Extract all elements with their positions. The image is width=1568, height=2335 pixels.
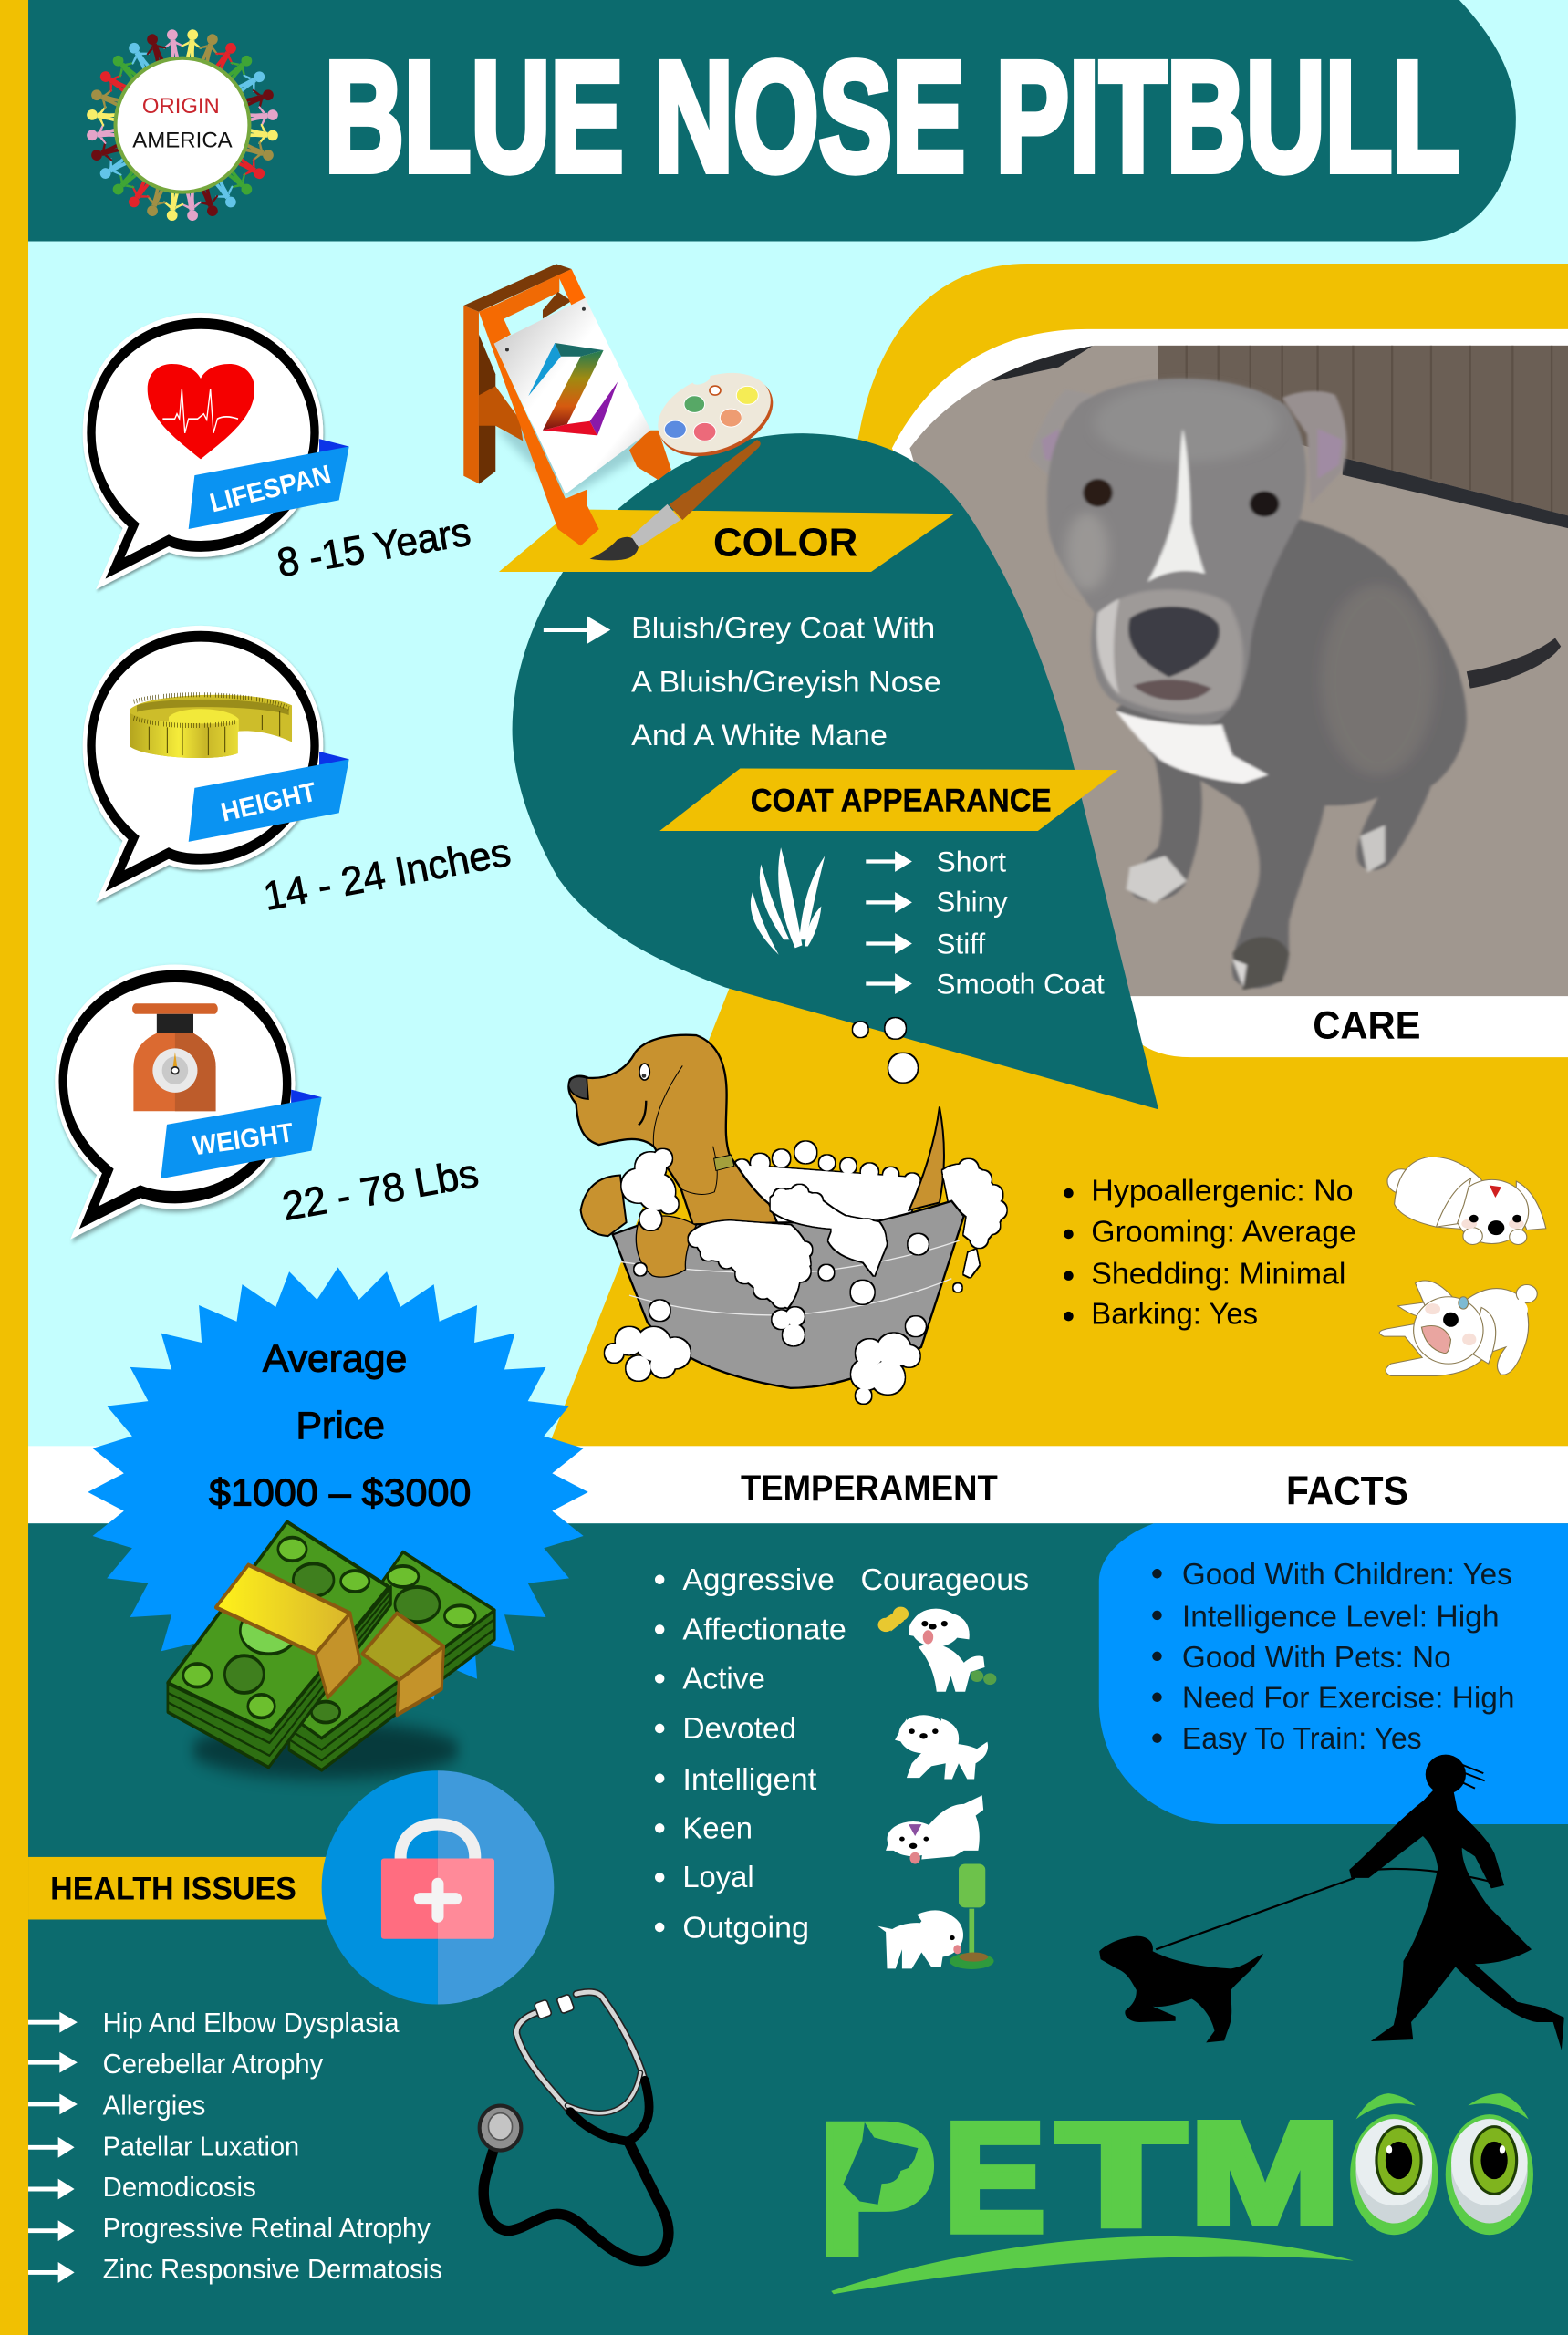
petmoo logo: M bbox=[1189, 2093, 1340, 2253]
arrows bbox=[28, 2012, 78, 2283]
facts list: Need For Exercise: High bbox=[1182, 1682, 1515, 1716]
eyes bbox=[1350, 2114, 1533, 2235]
care list: Shedding: Minimal bbox=[1091, 1257, 1345, 1291]
facts list bbox=[1152, 1558, 1515, 1756]
icon: weighing scale bbox=[132, 1003, 218, 1111]
coat appearance list: Shiny bbox=[936, 886, 1008, 918]
height speech bubble: HEIGHT bbox=[218, 777, 319, 828]
puppy barking bbox=[1379, 1281, 1537, 1375]
lower teal panel bbox=[28, 1523, 1568, 2335]
origin logo: AMERICA bbox=[132, 129, 234, 153]
puppy with food dispenser bbox=[878, 1864, 994, 1969]
coat appearance banner bbox=[659, 768, 1118, 831]
color description text: A Bluish/Greyish Nose bbox=[631, 664, 941, 698]
bullets bbox=[1064, 1188, 1074, 1321]
coat appearance list: Smooth Coat bbox=[936, 968, 1105, 1001]
yellow care panel bbox=[548, 264, 1568, 1448]
weight speech bubble: WEIGHT bbox=[191, 1117, 296, 1161]
facts list: Good With Pets: No bbox=[1182, 1641, 1451, 1675]
petmoo logo: T bbox=[1057, 2092, 1185, 2256]
arrow bbox=[866, 851, 912, 994]
weight value: 22 - 78 Lbs bbox=[279, 1151, 482, 1230]
icon: heart with heartbeat bbox=[148, 364, 254, 459]
stethoscope icon bbox=[480, 1992, 669, 2261]
temperament list: Outgoing bbox=[682, 1912, 809, 1946]
color description text: And A White Mane bbox=[631, 718, 888, 752]
coat appearance heading: COAT APPEARANCE bbox=[751, 783, 1052, 818]
teal color panel bbox=[513, 433, 1158, 1109]
care list: Barking: Yes bbox=[1091, 1298, 1258, 1332]
temperament heading: TEMPERAMENT bbox=[741, 1468, 998, 1509]
color heading: COLOR bbox=[713, 521, 857, 565]
average price starburst: Average bbox=[263, 1337, 407, 1380]
health issues list: Progressive Retinal Atrophy bbox=[103, 2214, 431, 2244]
health issues banner bbox=[28, 1857, 334, 1919]
care heading: CARE bbox=[1313, 1004, 1421, 1047]
woman walking dog silhouette bbox=[1099, 1755, 1564, 2050]
health issues list: Hip And Elbow Dysplasia bbox=[103, 2008, 400, 2039]
origin logo bbox=[86, 28, 279, 222]
coat appearance list: Short bbox=[936, 845, 1006, 877]
medical lock circle icon bbox=[322, 1770, 554, 2005]
temperament list: Intelligent bbox=[682, 1763, 817, 1797]
petmoo logo: P bbox=[817, 2085, 937, 2293]
health issues list bbox=[28, 2008, 442, 2285]
temperament list: Active bbox=[682, 1662, 765, 1696]
color description text bbox=[544, 611, 941, 752]
temperament list bbox=[655, 1563, 1029, 1946]
health issues list: Allergies bbox=[103, 2091, 205, 2121]
lifespan speech bubble bbox=[91, 324, 349, 568]
health issues list: Cerebellar Atrophy bbox=[103, 2050, 324, 2080]
paint palette icon bbox=[645, 354, 784, 472]
health issues list: Zinc Responsive Dermatosis bbox=[103, 2255, 442, 2285]
health issues heading: HEALTH ISSUES bbox=[50, 1871, 296, 1906]
lifespan value: 8 -15 Years bbox=[274, 510, 473, 586]
bullets bbox=[1152, 1569, 1162, 1743]
height speech bubble bbox=[91, 637, 349, 881]
average price starburst: $1000 – $3000 bbox=[209, 1471, 471, 1514]
dog in bath tub illustration bbox=[568, 1018, 1006, 1403]
facts blue panel bbox=[1099, 1523, 1568, 1824]
white heading band bbox=[28, 1446, 1568, 1523]
paint brush icon bbox=[590, 440, 761, 560]
average price starburst: Price bbox=[296, 1404, 385, 1447]
origin logo: ORIGIN bbox=[142, 94, 220, 119]
facts list: Intelligence Level: High bbox=[1182, 1600, 1500, 1634]
puppy lying down bbox=[1387, 1157, 1546, 1244]
health issues list: Patellar Luxation bbox=[103, 2132, 299, 2162]
temperament list: Loyal bbox=[682, 1861, 754, 1894]
facts list: Easy To Train: Yes bbox=[1182, 1722, 1422, 1756]
facts heading: FACTS bbox=[1286, 1468, 1408, 1513]
care list: Grooming: Average bbox=[1091, 1216, 1356, 1250]
puppies column bbox=[878, 1607, 996, 1969]
petmoo logo: E bbox=[944, 2091, 1045, 2264]
temperament list: Courageous bbox=[861, 1563, 1029, 1597]
bullets bbox=[655, 1575, 664, 1932]
coat appearance list: Stiff bbox=[936, 928, 985, 960]
color banner bbox=[499, 509, 954, 572]
lifespan speech bubble: LIFESPAN bbox=[207, 460, 334, 518]
temperament list: Aggressive bbox=[682, 1563, 835, 1597]
coat appearance list bbox=[866, 845, 1105, 1001]
dog head cut-out in letter P bbox=[843, 2122, 918, 2205]
puppy standing bbox=[895, 1715, 988, 1779]
white frame around photo bbox=[892, 329, 1568, 1057]
temperament list: Devoted bbox=[682, 1712, 796, 1746]
easel icon bbox=[463, 264, 671, 545]
height value: 14 - 24 Inches bbox=[260, 830, 514, 919]
facts list: Good With Children: Yes bbox=[1182, 1558, 1512, 1592]
care list bbox=[1064, 1175, 1356, 1332]
puppy with bone bbox=[878, 1607, 996, 1692]
left yellow edge strip bbox=[0, 0, 28, 2335]
health issues list: Demodicosis bbox=[103, 2173, 256, 2203]
temperament list: Keen bbox=[682, 1812, 753, 1846]
weight speech bubble bbox=[63, 976, 322, 1218]
puppy bowing bbox=[886, 1795, 983, 1864]
icon: grass bbox=[751, 847, 825, 955]
icon: measuring tape bbox=[130, 695, 292, 758]
petmoo logo bbox=[817, 2085, 1533, 2294]
money stacks icon bbox=[168, 1521, 494, 1779]
header band bbox=[28, 0, 1516, 241]
temperament list: Affectionate bbox=[682, 1613, 846, 1646]
arrow bbox=[544, 616, 610, 644]
photo of blue nose pitbull bbox=[893, 335, 1568, 1005]
average price starburst bbox=[88, 1267, 588, 1717]
care list: Hypoallergenic: No bbox=[1091, 1175, 1354, 1209]
color description text: Bluish/Grey Coat With bbox=[631, 611, 935, 645]
